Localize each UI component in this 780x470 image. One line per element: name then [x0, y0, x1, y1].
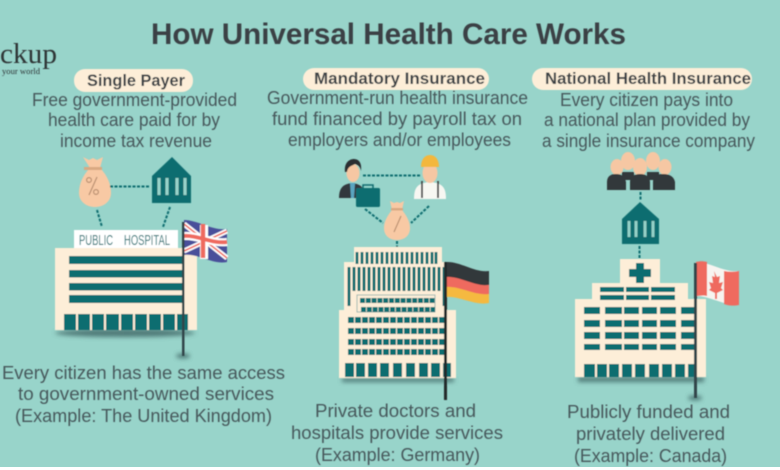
- caption: mandatory insurance: [291, 401, 503, 465]
- icon: worker: [414, 155, 446, 199]
- logo fragment: your world: [2, 67, 40, 76]
- panel: mandatory insurance: [267, 68, 528, 465]
- description: single payer: income tax revenue: [60, 131, 212, 151]
- icon: briefcase: [356, 185, 380, 207]
- icon: money bag: [79, 157, 111, 207]
- icon: government building: [152, 157, 191, 203]
- description: mandatory insurance: employers and/or employees: [288, 130, 511, 150]
- description: mandatory insurance: [267, 88, 528, 150]
- hospital: canada: [575, 259, 706, 382]
- caption: single payer: [2, 363, 285, 426]
- heading: mandatory insurance: Mandatory Insurance: [314, 69, 485, 88]
- icon: employer: [339, 159, 365, 198]
- panel: single payer: [2, 69, 285, 426]
- arrow: bag to government: [110, 186, 150, 188]
- caption: single payer: to government-owned services: [18, 384, 274, 404]
- caption: national health insurance: [567, 402, 730, 466]
- heading: national health insurance: National Health Insurance: [545, 69, 751, 88]
- arrow: government to hospital: [163, 207, 170, 227]
- description: single payer: health care paid for by: [48, 110, 220, 130]
- description: mandatory insurance: fund financed by payroll tax on: [272, 109, 522, 129]
- panel: national health insurance: [532, 68, 755, 466]
- flag: germany: [444, 262, 489, 400]
- arrow: employer to worker: [363, 174, 420, 176]
- logo fragment: ckup: [0, 39, 57, 70]
- caption: national health insurance: Publicly funded and: [567, 402, 730, 422]
- arrow: employer to fund: [365, 209, 383, 223]
- caption: mandatory insurance: hospitals provide services: [291, 423, 503, 443]
- flag: united kingdom: [176, 220, 227, 358]
- heading: single payer: Single Payer: [87, 71, 185, 90]
- description: national health insurance: Every citizen pays into: [560, 90, 733, 110]
- caption: mandatory insurance: Private doctors and: [315, 401, 476, 421]
- description: single payer: Free government-provided: [32, 90, 237, 110]
- caption: single payer: Every citizen has the same access: [2, 363, 285, 383]
- hospital: public: HOSPITAL: [124, 232, 170, 249]
- hospital: public: [55, 230, 197, 337]
- title: How Universal Health Care Works: [151, 18, 626, 51]
- arrow: government to hospital: [638, 246, 640, 258]
- hospital: germany: [339, 247, 456, 382]
- icon: citizens: [607, 152, 675, 190]
- icon: money bag: [384, 201, 410, 240]
- description: national health insurance: a national plan provided by: [544, 110, 750, 130]
- arrow: citizens to government: [640, 192, 642, 201]
- arrow: worker to fund: [411, 206, 429, 223]
- description: mandatory insurance: Government-run health insurance: [267, 88, 528, 108]
- icon: government building: [622, 202, 659, 244]
- flag: canada: [688, 261, 739, 400]
- arrow: bag to hospital: [97, 210, 102, 227]
- caption: mandatory insurance: (Example: Germany): [315, 445, 480, 465]
- caption: national health insurance: privately delivered: [576, 424, 725, 444]
- description: national health insurance: a single insurance company: [542, 131, 755, 151]
- caption: single payer: (Example: The United Kingdom): [15, 406, 272, 426]
- hospital: public: PUBLIC: [79, 232, 113, 249]
- description: single payer: [32, 90, 237, 151]
- caption: national health insurance: (Example: Canada): [574, 446, 727, 466]
- description: national health insurance: [542, 90, 755, 151]
- arrow: fund to hospital: [396, 241, 398, 247]
